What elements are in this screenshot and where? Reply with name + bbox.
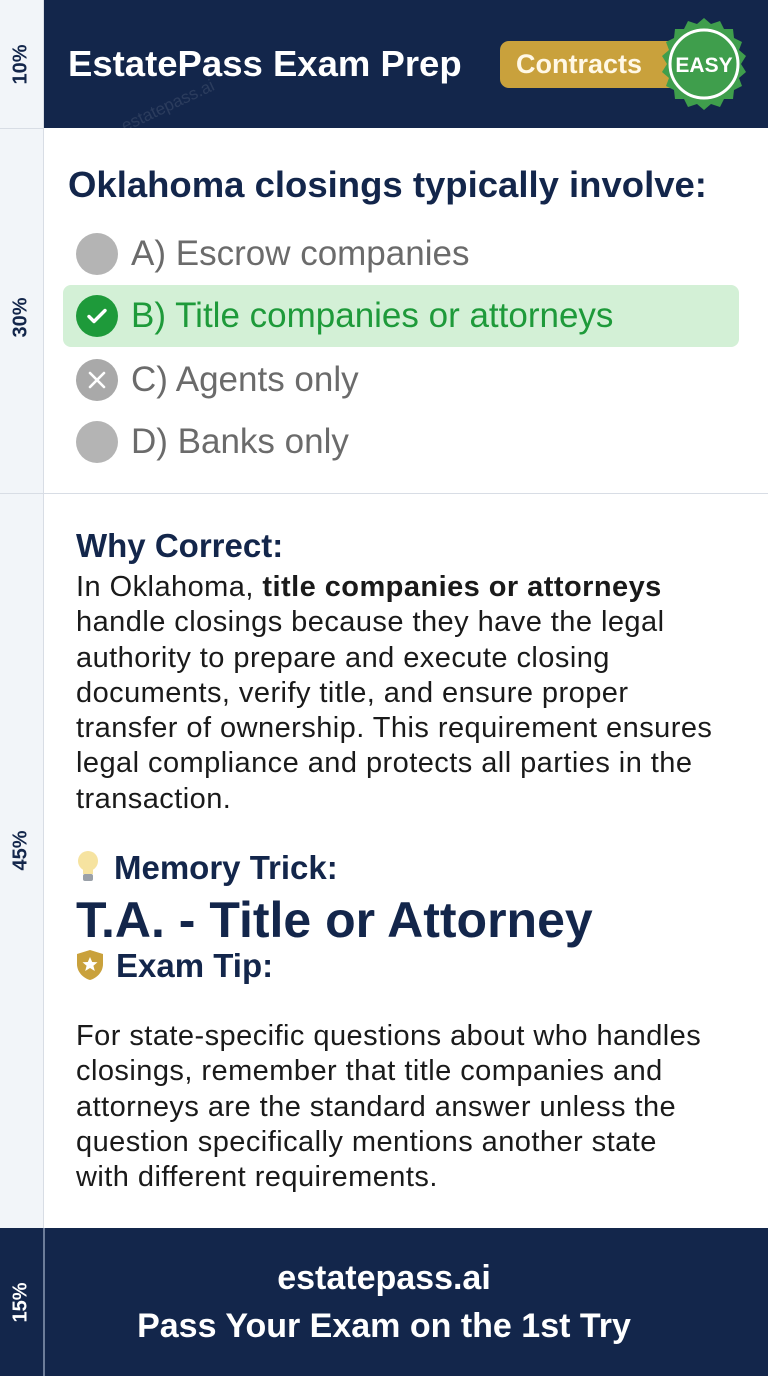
sidebar: header section (0, 0, 44, 129)
exam tip text: For state-specific questions about who handles (76, 1020, 701, 1052)
header band (44, 0, 768, 128)
divider (44, 493, 768, 494)
footer band (45, 1228, 768, 1376)
exam tip text: question specifically mentions another state (76, 1126, 657, 1158)
option D: D) Banks only (131, 422, 349, 461)
why correct text: transaction. (76, 783, 231, 815)
exam tip text: closings, remember that title companies and (76, 1055, 663, 1087)
icon: shield star (77, 950, 103, 980)
exam tip text (76, 1020, 701, 1193)
why correct text (76, 571, 712, 815)
footer url: estatepass.ai (277, 1259, 491, 1297)
difficulty seal: EASY (662, 18, 746, 110)
sidebar: question section (0, 129, 44, 494)
watermark: estatepass.ai (118, 76, 217, 135)
why correct heading: Why Correct: (76, 527, 283, 564)
option C: C) Agents only (131, 360, 359, 399)
sidebar label 45%: 45% (10, 830, 32, 870)
option A: A) Escrow companies (131, 234, 469, 273)
why correct text: authority to prepare and execute closing (76, 642, 610, 674)
option B: B) Title companies or attorneys (131, 296, 613, 335)
why correct text: In Oklahoma, title companies or attorneys (76, 571, 662, 603)
why correct text: legal compliance and protects all parties in the (76, 747, 692, 779)
difficulty seal: EASY: EASY (675, 54, 733, 77)
why correct text: handle closings because they have the legal (76, 606, 664, 638)
exam tip heading with shield icon: Exam Tip: (116, 947, 273, 984)
question heading: Oklahoma closings typically involve: (68, 164, 707, 205)
icon: light bulb (78, 851, 98, 881)
sidebar: explanation section (0, 494, 44, 1228)
category tag: Contracts: Contracts (516, 49, 642, 79)
why correct text: documents, verify title, and ensure proper (76, 677, 628, 709)
header title: EstatePass Exam Prep (68, 43, 462, 84)
option B highlight (correct) (63, 285, 739, 347)
sidebar: footer section (0, 1228, 45, 1376)
exam tip text: attorneys are the standard answer unless the (76, 1091, 676, 1123)
category tag: Contracts (500, 41, 680, 88)
sidebar label 15%: 15% (10, 1282, 32, 1322)
why correct text: transfer of ownership. This requirement ensures (76, 712, 712, 744)
sidebar label 10%: 10% (10, 44, 32, 84)
sidebar label 30%: 30% (10, 297, 32, 337)
memory trick phrase: T.A. - Title or Attorney (76, 892, 593, 948)
exam tip text: with different requirements. (76, 1161, 438, 1193)
footer tagline: Pass Your Exam on the 1st Try (137, 1307, 631, 1345)
memory trick heading with bulb icon: Memory Trick: (114, 849, 338, 886)
